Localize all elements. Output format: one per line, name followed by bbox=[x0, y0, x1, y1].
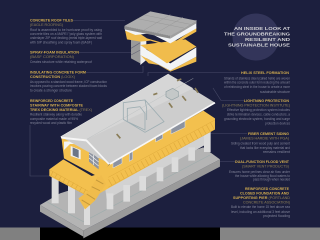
right text: reinforced concrete foundation: REINFORCED CONCRETE bbox=[245, 187, 290, 191]
right text: reinforced concrete foundation: level, including an additional 3 feet above bbox=[231, 210, 290, 214]
right text: helix steel formation: Strands of stainless steel (called helix) are woven bbox=[224, 76, 290, 80]
bottom band bbox=[0, 228, 320, 240]
under-floor walls bbox=[105, 132, 207, 199]
title bbox=[224, 26, 291, 48]
right text: dual-function flood vent: DUAL-FUNCTION FLOOD VENT bbox=[235, 160, 290, 164]
title circle bbox=[232, 14, 280, 60]
left text: concrete roof tiles: concrete tiles on a MAPEI "poly glass system with bbox=[30, 32, 102, 36]
right text: reinforced concrete foundation: Built to elevate the home 15 feet above sea bbox=[231, 205, 290, 209]
right text: fiber cement siding: remains resilient bbox=[263, 150, 290, 154]
right text: lightning protection: (LIGHTNING PROTECTION INSTITUTE) bbox=[222, 104, 290, 108]
left text: concrete roof tiles: with SIP sheathing and spray foam (BASF) bbox=[30, 40, 92, 44]
left text: concrete roof tiles bbox=[30, 18, 102, 44]
wall windows bbox=[113, 121, 185, 168]
left text: spray foam insulation: (BASF CORPORATION) bbox=[30, 55, 74, 59]
right text: helix steel formation: of reinforcing steel in the house to create a more bbox=[224, 85, 290, 89]
left text: reinforced concrete stairway: STAIRWAY WITH COMPOSITE bbox=[30, 104, 84, 108]
title: AN INSIDE LOOK AT bbox=[234, 26, 290, 31]
left text: spray foam insulation: Creates structure while retaining waterproof bbox=[30, 60, 92, 64]
left text: reinforced concrete stairway: Resilient stairway along with durable bbox=[30, 112, 82, 116]
right text: reinforced concrete foundation: CLOSED FOUNDATION AND bbox=[240, 192, 289, 196]
left text: insulating concrete form: INSULATING CONCRETE FORM bbox=[30, 71, 86, 75]
right text: helix steel formation: within the concrete outer form reducing the amount bbox=[224, 80, 290, 84]
yellow deck and wall bbox=[49, 111, 215, 197]
left text: insulating concrete form: involves pouring concrete between stacked foam blocks bbox=[30, 84, 107, 88]
left text: reinforced concrete stairway: TREX DECKING MATERIAL (TREX) bbox=[30, 108, 92, 112]
right text: lightning protection: LIGHTNING PROTECTION bbox=[244, 99, 289, 103]
left text: concrete roof tiles: CONCRETE ROOF TILES bbox=[30, 18, 74, 22]
vent box bbox=[166, 88, 178, 100]
left text: insulating concrete form: to create a stronger structure bbox=[30, 88, 72, 92]
deck railing bbox=[50, 120, 215, 197]
roof bbox=[61, 74, 215, 165]
left text: insulating concrete form bbox=[30, 71, 107, 92]
right text: fiber cement siding: that looks like everyday material and bbox=[240, 146, 290, 150]
title: RESILIENT AND bbox=[245, 37, 291, 42]
right text: lightning protection: protection devices bbox=[265, 122, 290, 126]
left text: reinforced concrete stairway: REINFORCED CONCRETE bbox=[30, 99, 74, 103]
right text: dual-function flood vent bbox=[229, 160, 291, 182]
roof skylights bbox=[117, 79, 198, 138]
right text: dual-function flood vent: pass through when needed bbox=[253, 178, 290, 182]
left text: reinforced concrete stairway: composite material made of 95% bbox=[30, 117, 78, 121]
right text: fiber cement siding: (JAMES HARDIE WITH PGA) bbox=[240, 136, 289, 140]
right text: dual-function flood vent: (SMART VENT PRODUCTS) bbox=[242, 164, 289, 168]
support piers bbox=[52, 127, 211, 225]
left text: reinforced concrete stairway: recycled wood and plastic film bbox=[30, 121, 72, 125]
right text: lightning protection: Effective lightning protection system includes bbox=[227, 108, 290, 112]
left text: insulating concrete form: CONSTRUCTION (LOGIX) bbox=[30, 75, 75, 79]
right text: helix steel formation: sustainable structure bbox=[260, 90, 290, 94]
right text: fiber cement siding: Siding created from wood pulp and cement bbox=[231, 142, 290, 146]
left text: reinforced concrete stairway bbox=[30, 99, 92, 125]
right text: lightning protection bbox=[222, 99, 290, 126]
concrete foundation slab bbox=[40, 147, 220, 238]
right text: reinforced concrete foundation: CONCRETE ASSOCIATION) bbox=[243, 200, 290, 204]
left text: spray foam insulation bbox=[30, 50, 92, 64]
left text: spray foam insulation: SPRAY-FOAM INSULATION bbox=[30, 50, 79, 54]
dormer frame bbox=[123, 100, 164, 132]
stairs bbox=[78, 173, 106, 209]
right text: lightning protection: strike termination devices, cable conductors, a bbox=[227, 112, 290, 116]
right text: helix steel formation bbox=[224, 71, 290, 94]
icon: roof layer cross section bbox=[124, 11, 196, 72]
house illustration bbox=[40, 74, 220, 238]
right text: fiber cement siding: FIBER CEMENT SIDING bbox=[248, 132, 289, 136]
title: THE GROUNDBREAKING bbox=[224, 32, 290, 36]
left text: concrete roof tiles: underlayer ZIP roof decking (metal triple-layered wall bbox=[30, 36, 102, 40]
left text: concrete roof tiles: Roof is assembled to be hurricane proof by using bbox=[30, 28, 102, 32]
right text: reinforced concrete foundation: projected flooding bbox=[263, 214, 290, 218]
callout leader lines bbox=[30, 20, 247, 176]
right text: helix steel formation: HELIX STEEL FORMATION bbox=[241, 71, 289, 75]
right text: fiber cement siding bbox=[231, 132, 290, 154]
right text: lightning protection: grounding electrode system, bonding and surge bbox=[224, 117, 290, 121]
right text: reinforced concrete foundation: SUPPORTING PIER (PORTLAND bbox=[233, 196, 290, 200]
left text: insulating concrete form: As opposed to a standard wood frame, ICF construction bbox=[30, 80, 107, 84]
gable wall bbox=[61, 137, 109, 177]
title: SUSTAINABLE HOUSE bbox=[228, 42, 290, 48]
right text: reinforced concrete foundation bbox=[231, 187, 290, 218]
right text: dual-function flood vent: Ensures home perlines clear air flow under bbox=[229, 170, 291, 174]
left text: concrete roof tiles: (EAGLE ROOFING) bbox=[30, 23, 63, 27]
right text: dual-function flood vent: the house while allowing flood waters to bbox=[235, 174, 290, 178]
